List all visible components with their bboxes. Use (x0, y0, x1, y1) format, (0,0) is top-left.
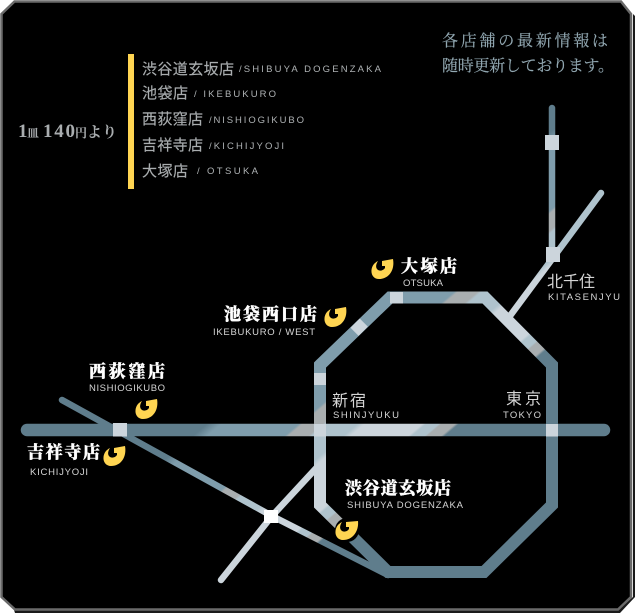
station: Kichijoji (113, 423, 127, 436)
label: Kitasenju: KITASENJYU (548, 292, 620, 303)
store: Kichijoji (142, 137, 284, 154)
label: Kitasenju (547, 273, 620, 303)
label: Shibuya Dogenzaka: 渋谷道玄坂店 (345, 478, 451, 498)
store: Nishiogikubo: 西荻窪店 (142, 111, 203, 128)
label: Otsuka (401, 256, 457, 289)
subway map lines (27, 108, 604, 580)
store list (142, 61, 382, 180)
icon: Ikebukuro crescent (324, 307, 346, 327)
note text: 随時更新しております。 (442, 57, 614, 75)
note text (442, 32, 614, 75)
label: Otsuka: 大塚店 (401, 256, 457, 276)
line: southwest branch (221, 464, 320, 580)
store: Shibuya Dogenzaka: 渋谷道玄坂店 (142, 61, 234, 78)
line: west branch (62, 400, 388, 575)
icon: Nishiogikubo crescent (135, 399, 157, 419)
store: Nishiogikubo (142, 111, 304, 128)
station: Shinjuku crossing (314, 424, 326, 436)
station: left ring (314, 373, 326, 385)
store: Ikebukuro: 池袋店 (142, 85, 188, 102)
label: Nishiogikubo: NISHIOGIKUBO (89, 383, 165, 394)
store: Shibuya Dogenzaka (142, 61, 382, 78)
line: north vertical (549, 108, 555, 255)
store: Nishiogikubo: /NISHIOGIKUBO (209, 115, 304, 126)
label: Tokyo: TOKYO (503, 410, 541, 421)
station: Kitasenju (546, 247, 560, 262)
store: Kichijoji: /KICHIJYOJI (209, 141, 284, 152)
label: Otsuka: OTSUKA (403, 278, 444, 289)
icon: Otsuka crescent (371, 259, 393, 279)
station: top ring (390, 292, 403, 304)
label: Tokyo (503, 390, 541, 421)
label: Shinjuku: SHINJYUKU (333, 410, 399, 421)
label: Kichijoji (27, 442, 100, 478)
station: Tokyo crossing (546, 424, 558, 436)
store: Shibuya Dogenzaka: /SHIBUYA DOGENZAKA (239, 64, 382, 75)
label: Ikebukuro West: 池袋西口店 (224, 304, 317, 324)
line: central horizontal (27, 424, 604, 436)
label: Kichijoji: 吉祥寺店 (27, 442, 100, 462)
store: Kichijoji: 吉祥寺店 (142, 137, 203, 154)
label: Shibuya Dogenzaka: SHIBUYA DOGENZAKA (347, 500, 464, 511)
station: upper-left ring (351, 319, 368, 336)
note text: 各店舗の最新情報は (442, 32, 608, 50)
label: Tokyo: 東京 (506, 390, 541, 408)
label: Shinjuku: 新宿 (332, 392, 366, 410)
line: northeast branch (507, 193, 601, 320)
store: Otsuka: 大塚店 (142, 163, 188, 180)
line: ring (320, 298, 552, 572)
price label: 140 (43, 121, 75, 142)
station: north top (545, 135, 559, 150)
label: Kitasenju: 北千住 (547, 273, 595, 291)
store: Ikebukuro (142, 85, 276, 102)
store: Ikebukuro: / IKEBUKURO (194, 89, 276, 100)
store: Otsuka: / OTSUKA (197, 166, 259, 177)
label: Ikebukuro West (213, 304, 317, 338)
price label: より (87, 124, 117, 141)
station: junction (264, 510, 278, 523)
ring station markers (314, 292, 558, 436)
price label: 円 (75, 126, 87, 140)
icon: Shibuya crescent (335, 518, 359, 542)
icon: Kichijoji crescent (103, 446, 125, 466)
yellow divider bar (128, 54, 134, 189)
label: Shinjuku (332, 392, 399, 421)
price label: 皿 (27, 126, 39, 140)
label: Kichijoji: KICHIJYOJI (30, 467, 88, 478)
store: Otsuka (142, 163, 259, 180)
label: Nishiogikubo: 西荻窪店 (89, 361, 165, 381)
price label: 1 (18, 121, 28, 142)
label: Ikebukuro West: IKEBUKURO / WEST (213, 327, 315, 338)
price label (18, 121, 117, 142)
label: Nishiogikubo (89, 361, 165, 394)
label: Shibuya Dogenzaka (345, 478, 464, 511)
